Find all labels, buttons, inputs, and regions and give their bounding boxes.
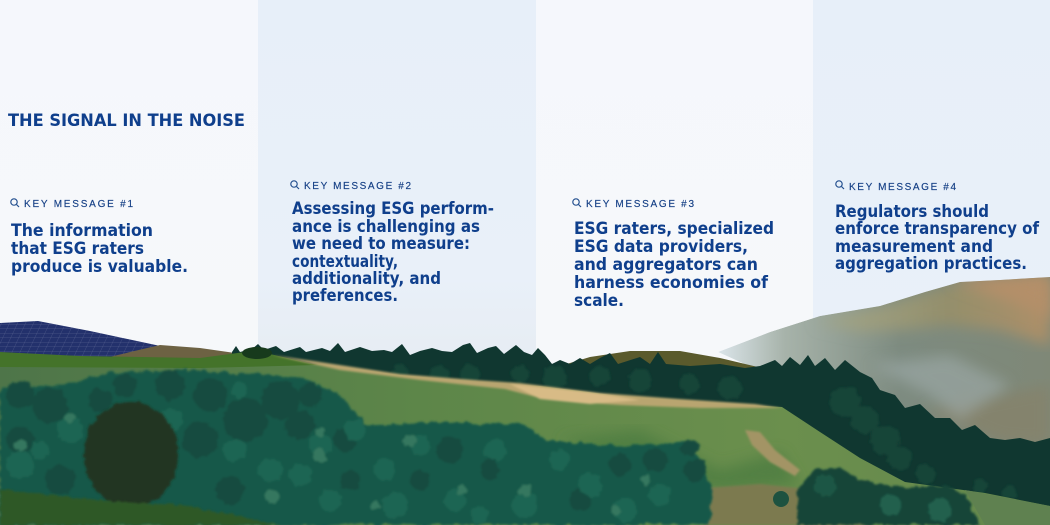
pine tree line xyxy=(232,343,1050,510)
text block: aggregation practices. xyxy=(835,254,1027,273)
solar panel hill xyxy=(0,321,325,375)
dense forest xyxy=(0,370,712,525)
icon: magnifier xyxy=(291,181,299,189)
text block: contextuality, xyxy=(292,252,398,271)
icon: magnifier xyxy=(573,199,581,207)
key message 2 xyxy=(291,181,494,305)
text block: Assessing ESG perform- xyxy=(292,199,494,218)
key message 4 xyxy=(835,181,1040,273)
text block: we need to measure: xyxy=(292,234,470,253)
text block: ance is challenging as xyxy=(292,217,480,236)
text block: Regulators should xyxy=(835,202,989,221)
text block xyxy=(835,202,1040,273)
label: KEY MESSAGE #1 xyxy=(24,199,133,210)
distant brown hill xyxy=(560,351,762,385)
text block: produce is valuable. xyxy=(11,257,188,276)
bright grass strip xyxy=(0,352,318,368)
label: KEY MESSAGE #2 xyxy=(304,181,411,192)
text block xyxy=(292,199,494,305)
lower right tree cluster xyxy=(798,468,980,525)
small round shrub xyxy=(773,491,789,507)
text block: preferences. xyxy=(292,286,398,305)
grass at right edge xyxy=(965,490,1050,525)
panel: column 1 background xyxy=(0,0,258,370)
key message 1 xyxy=(11,199,188,276)
green meadow hillside xyxy=(0,360,1050,525)
distant mountain xyxy=(718,275,1050,450)
title: THE SIGNAL IN THE NOISE xyxy=(8,111,245,131)
label: KEY MESSAGE #3 xyxy=(586,199,694,210)
small hilltop bush xyxy=(242,347,272,359)
panel: column 3 background xyxy=(536,0,813,370)
meadow trail xyxy=(745,430,800,476)
panel: column 4 background xyxy=(813,0,1050,450)
foreground bushes xyxy=(0,490,280,525)
text block: The information xyxy=(11,221,153,240)
landscape photo illustration xyxy=(0,275,1050,525)
text block: harness economies of xyxy=(574,273,769,292)
sunlit dry grass ridge xyxy=(272,355,782,408)
dark foreground tree xyxy=(84,402,178,508)
panel: column 2 background xyxy=(258,0,536,370)
key message 3 xyxy=(573,199,774,310)
text block: and aggregators can xyxy=(574,255,758,274)
text block: that ESG raters xyxy=(11,239,144,258)
text block xyxy=(574,219,774,310)
text block: measurement and xyxy=(835,237,993,256)
text block: additionality, and xyxy=(292,269,441,288)
meadow shadow xyxy=(560,430,800,490)
text block: ESG data providers, xyxy=(574,237,748,256)
icon: magnifier xyxy=(11,199,19,207)
text block: ESG raters, specialized xyxy=(574,219,774,238)
lower brown meadow xyxy=(705,484,870,525)
treeline foliage xyxy=(392,364,1017,499)
icon: magnifier xyxy=(836,181,844,189)
text block xyxy=(11,221,188,276)
label: KEY MESSAGE #4 xyxy=(849,182,956,193)
text block: scale. xyxy=(574,291,624,310)
